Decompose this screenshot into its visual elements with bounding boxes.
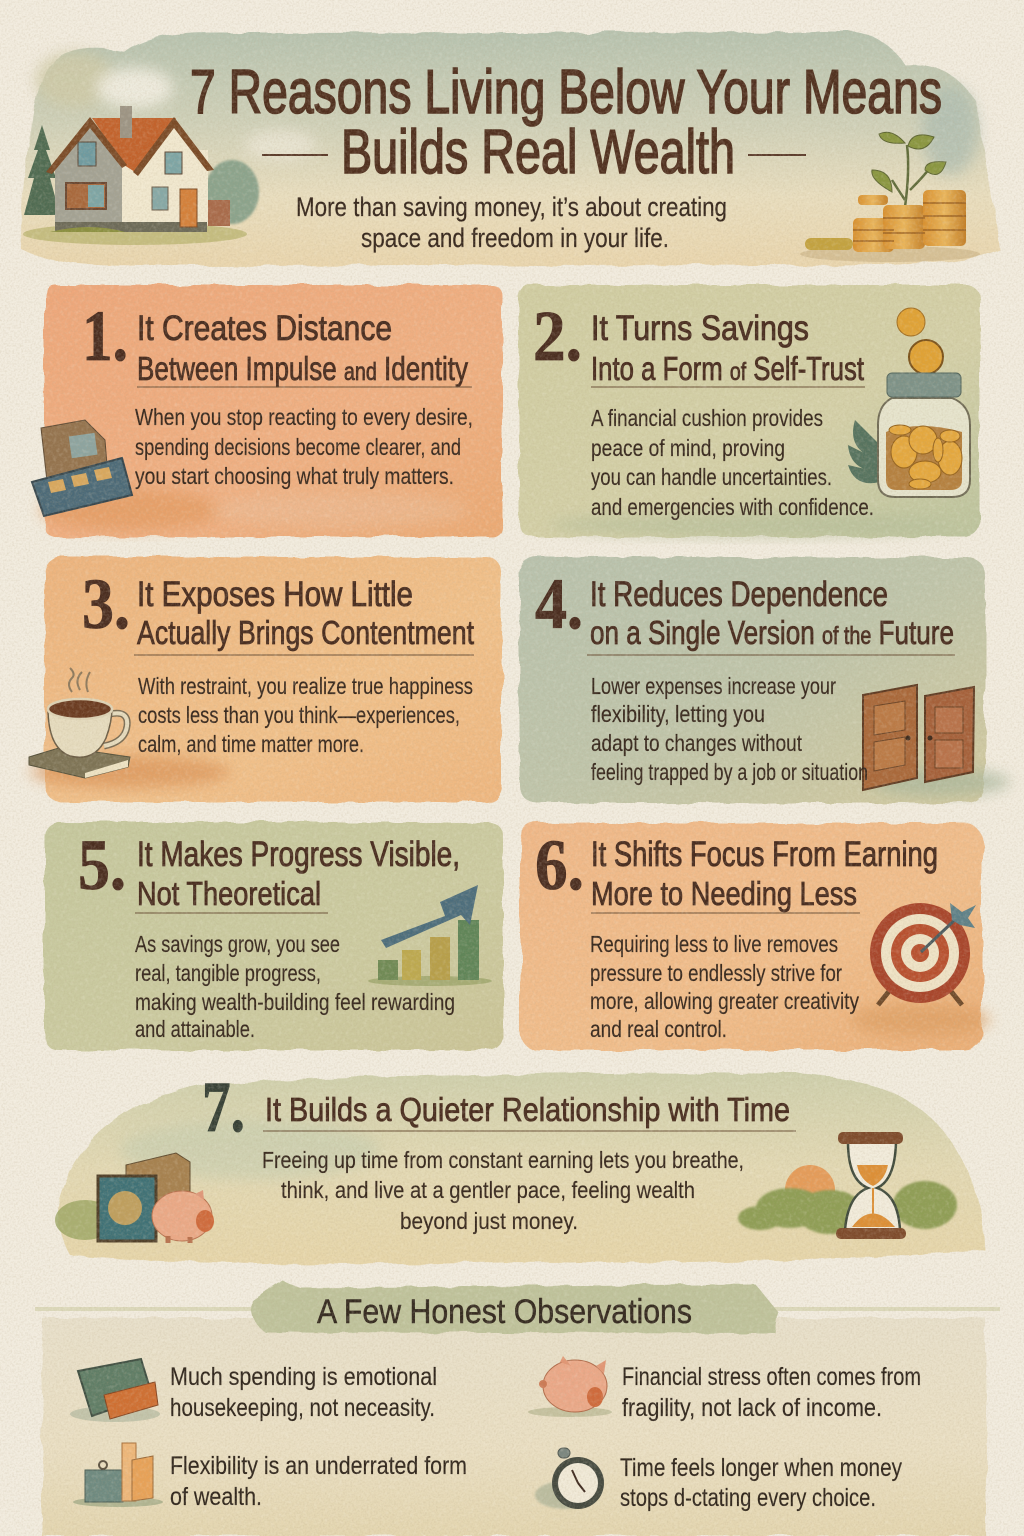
card 3 text [138, 673, 473, 757]
observation: flexibility: Flexibility is an underrated form [170, 1452, 467, 1480]
observations heading band: A Few Honest Observations [317, 1293, 692, 1331]
card 1 text: spending decisions become clearer, and [135, 434, 461, 460]
icon: hourglass with bushes [738, 1132, 957, 1239]
observation: spending [170, 1363, 437, 1422]
icon: stopwatch [535, 1448, 604, 1509]
title: Builds Real Wealth [341, 118, 735, 187]
number 7: 7. [202, 1067, 245, 1147]
card 6 text: more, allowing greater creativity [590, 988, 859, 1014]
card 2 text: you can handle uncertainties. [591, 464, 832, 490]
observation: spending: housekeeping, not neceasity. [170, 1394, 435, 1422]
panel: card 3 [29, 557, 502, 802]
subtitle [296, 192, 727, 253]
card 7 text: beyond just money. [400, 1208, 578, 1234]
number 6: 6. [535, 825, 584, 905]
section: observations [35, 1280, 1000, 1536]
card 3 heading: Actually Brings Contentment [137, 614, 474, 651]
card 5 text: As savings grow, you see [135, 931, 340, 957]
number 5: 5. [78, 825, 126, 905]
card 5 text: and attainable. [135, 1016, 255, 1042]
panel: header banner [22, 32, 1000, 266]
observation: flexibility: of wealth. [170, 1483, 262, 1511]
card 4 heading: on a Single Version of the Future [590, 614, 954, 651]
card 4 text: flexibility, letting you [591, 701, 765, 727]
observation: flexibility [170, 1452, 467, 1511]
icon: cash and wallet [70, 1359, 160, 1422]
card 2 text: peace of mind, proving [591, 435, 785, 461]
card 1 heading [137, 309, 472, 387]
icon: house [23, 106, 259, 245]
card 4 text: adapt to changes without [591, 730, 802, 756]
icon: target with dart [870, 903, 976, 1005]
icon: wallet and credit card [32, 420, 132, 516]
observation: stress [622, 1363, 921, 1422]
observation: stress: Financial stress often comes from [622, 1363, 921, 1391]
card 6 heading: It Shifts Focus From Earning [591, 835, 938, 874]
card 4 heading [587, 575, 955, 655]
panel: card 2 [519, 285, 980, 537]
card 2 heading: It Turns Savings [591, 309, 809, 348]
card 6 text: and real control. [590, 1016, 727, 1042]
number 4: 4. [535, 564, 583, 644]
observations backing panel [42, 1318, 986, 1536]
card 5 text [135, 931, 455, 1042]
card 2 heading [591, 309, 865, 387]
card 3 text: costs less than you think—experiences, [138, 702, 460, 728]
card 1 heading: Between Impulse and Identity [137, 350, 468, 387]
card 2 text: and emergencies with confidence. [591, 494, 874, 520]
panel: card 4 [519, 557, 1010, 803]
card 4 text: Lower expenses increase your [591, 673, 836, 699]
icon: coins and plant [800, 132, 980, 262]
card 6 text: pressure to endlessly strive for [590, 960, 842, 986]
panel: card 5 [44, 822, 503, 1050]
observation: time: stops d-ctating every choice. [620, 1484, 876, 1512]
cloud [35, 52, 978, 175]
observations heading band [251, 1280, 778, 1333]
card 5 heading: It Makes Progress Visible, [137, 835, 460, 874]
subtitle: space and freedom in your life. [361, 223, 669, 253]
icon: coffee cup on book [29, 668, 130, 778]
card 2 text: A financial cushion provides [591, 405, 823, 431]
card 4 text [591, 673, 868, 785]
card 4 heading: It Reduces Dependence [590, 575, 888, 614]
card 2 text [591, 405, 874, 520]
panel: card 6 [520, 823, 990, 1050]
card 5 text: real, tangible progress, [135, 960, 321, 986]
card 6 heading: More to Needing Less [591, 875, 857, 912]
card 7 text: Freeing up time from constant earning lets you breathe, [262, 1147, 744, 1173]
observation: spending: Much spending is emotional [170, 1363, 437, 1391]
card 6 heading [591, 835, 938, 913]
number 3: 3. [82, 564, 130, 644]
card 5 heading: Not Theoretical [137, 875, 321, 912]
card 7 heading: It Builds a Quieter Relationship with Time [265, 1091, 790, 1128]
icon: rising bar chart [368, 885, 492, 986]
icon: wallets and piggy bank [55, 1153, 214, 1243]
subtitle: More than saving money, it’s about creating [296, 192, 727, 222]
icon: bag and door [73, 1443, 163, 1507]
card 1 text: you start choosing what truly matters. [135, 463, 454, 489]
observation: time [620, 1454, 902, 1512]
card 1 heading: It Creates Distance [137, 309, 392, 348]
card 3 heading: It Exposes How Little [137, 575, 413, 614]
icon: piggy bank [528, 1356, 612, 1417]
panel: card 1 [32, 285, 502, 537]
card 3 text: With restraint, you realize true happiness [138, 673, 473, 699]
panel: card 7 [55, 1067, 985, 1264]
card 7 text [262, 1147, 744, 1234]
number 1: 1. [82, 296, 128, 376]
card 4 text: feeling trapped by a job or situation [591, 759, 868, 785]
title [190, 58, 942, 187]
card 1 text: When you stop reacting to every desire, [135, 404, 473, 430]
card 2 heading: Into a Form of Self-Trust [591, 350, 864, 387]
card 3 text: calm, and time matter more. [138, 731, 364, 757]
card 5 heading [135, 835, 460, 913]
card 6 text [590, 931, 859, 1042]
number 2: 2. [533, 296, 582, 376]
card 7 text: think, and live at a gentler pace, feeling wealth [281, 1177, 695, 1203]
card 6 text: Requiring less to live removes [590, 931, 838, 957]
card 1 text [135, 404, 473, 489]
card 5 text: making wealth-building feel rewarding [135, 989, 455, 1015]
observation: stress: fragility, not lack of income. [622, 1394, 882, 1422]
card 3 heading [134, 575, 474, 655]
icon: open doors [863, 685, 974, 790]
observation: time: Time feels longer when money [620, 1454, 902, 1482]
icon: coin jar [848, 308, 970, 497]
